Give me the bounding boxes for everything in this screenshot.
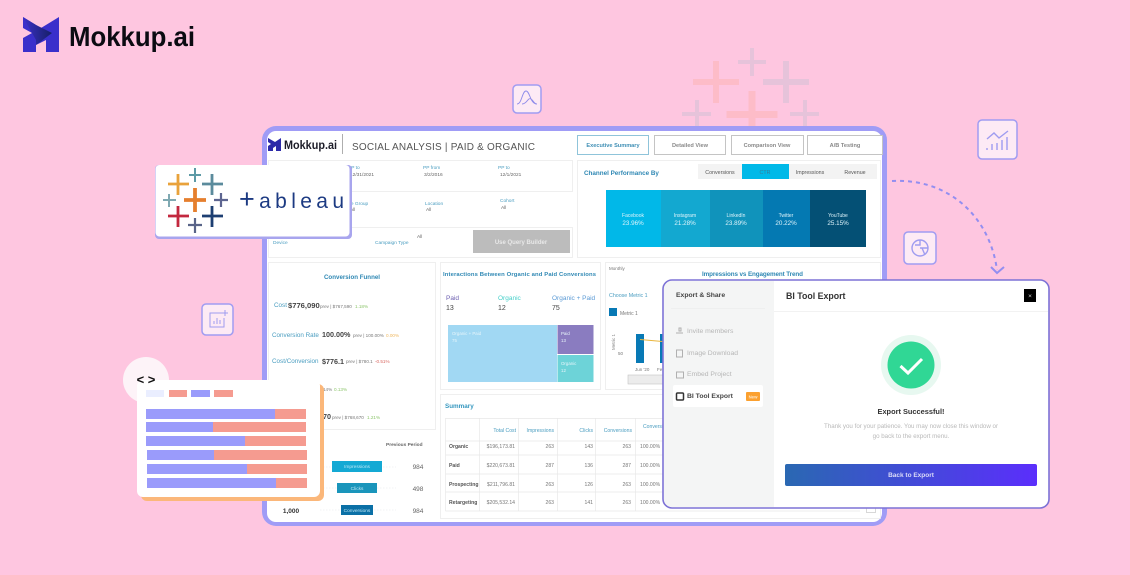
panel: summary table: 263 bbox=[622, 482, 631, 488]
funnel chart: 984 bbox=[413, 508, 424, 515]
channel treemap: YouTube bbox=[828, 213, 848, 219]
filter panel: 3/2/2016 bbox=[424, 172, 443, 178]
icon: add chart bbox=[202, 304, 233, 335]
funnel chart: Conversions bbox=[344, 508, 371, 514]
panel: summary table: Conversions bbox=[604, 428, 632, 434]
panel: impressions vs engagement trend: Jun '20 bbox=[635, 367, 650, 372]
panel: summary table: 136 bbox=[584, 463, 593, 469]
channel treemap: 25.15% bbox=[827, 220, 849, 227]
panel: conversion funnel: prev | $767,590 bbox=[320, 304, 352, 309]
panel: summary table: Total Cost bbox=[493, 428, 517, 434]
panel: summary table: 263 bbox=[546, 444, 554, 450]
close button bbox=[1024, 289, 1036, 302]
modal sidebar: Invite members bbox=[687, 328, 734, 335]
filter panel: Cohort bbox=[500, 198, 515, 204]
panel: impressions vs engagement trend bbox=[606, 262, 880, 390]
channel treemap: 23.96% bbox=[622, 220, 644, 227]
channel treemap bbox=[606, 190, 866, 247]
icon: code symbol: < > bbox=[137, 372, 156, 387]
filter panel: All bbox=[350, 207, 355, 213]
tableau mark bbox=[163, 168, 228, 233]
panel: conversion funnel: 0.00% bbox=[386, 333, 399, 338]
channel treemap: Instagram bbox=[674, 213, 696, 219]
panel: conversion funnel: 1.18% bbox=[355, 304, 368, 309]
funnel chart: Clicks bbox=[351, 486, 364, 492]
panel: organic and paid interactions: Organic + Paid bbox=[552, 295, 596, 302]
panel: summary table: Clicks bbox=[579, 428, 593, 434]
filter panel: PP to bbox=[348, 165, 360, 171]
panel: organic and paid interactions: 75 bbox=[552, 305, 560, 312]
panel: conversion funnel: 1.21% bbox=[367, 415, 380, 420]
panel: impressions vs engagement trend: Feb bbox=[657, 367, 665, 372]
channel treemap: 23.89% bbox=[725, 220, 747, 227]
filter panel: Campaign Type bbox=[375, 240, 409, 246]
panel: impressions vs engagement trend: Metric 1 bbox=[611, 334, 616, 350]
panel: conversion funnel: prev | $780.1 bbox=[346, 359, 373, 364]
channel treemap: Twitter bbox=[779, 213, 794, 219]
filter panel: PP from bbox=[423, 165, 440, 171]
panel: organic and paid interactions: Paid bbox=[446, 295, 459, 302]
card: tableau logo bbox=[155, 165, 352, 239]
panel: summary table: Paid bbox=[449, 463, 460, 469]
panel: summary table: Retargeting bbox=[449, 500, 477, 506]
modal sidebar: Image Download bbox=[687, 350, 738, 357]
panel: conversion funnel: 100.00% bbox=[322, 330, 351, 339]
panel: conversion funnel: Cost/Conversion bbox=[272, 358, 319, 365]
view tabs bbox=[578, 136, 882, 154]
filter panel: All bbox=[417, 234, 422, 240]
organic and paid treemap: 75 bbox=[452, 338, 457, 343]
panel: summary table: Prospecting bbox=[449, 482, 478, 488]
panel: organic and paid interactions: Organic bbox=[498, 295, 522, 302]
active menu item bbox=[673, 385, 763, 407]
panel: summary table: Summary bbox=[445, 403, 474, 410]
tableau wordmark: +ableau bbox=[239, 184, 344, 214]
organic and paid treemap: Organic + Paid bbox=[452, 331, 482, 336]
panel: summary table: 100.00% bbox=[640, 463, 661, 469]
stacked bars bbox=[146, 409, 307, 488]
background tableau plus pattern bbox=[682, 48, 819, 130]
panel: summary table: 100.00% bbox=[640, 500, 661, 506]
filter panel: Location bbox=[425, 201, 443, 207]
active menu item: New bbox=[749, 394, 758, 400]
arrow: dashed curve bbox=[892, 181, 1004, 273]
filter panel: 12/1/2021 bbox=[500, 172, 522, 178]
success message bbox=[824, 407, 998, 440]
metric toggle: CTR bbox=[760, 170, 771, 176]
logo: Mokkup.ai: Mokkup.ai bbox=[69, 21, 195, 52]
panel: impressions vs engagement trend: Choose Metric 1 bbox=[609, 293, 648, 299]
panel: summary table: Impressions bbox=[527, 428, 554, 434]
channel treemap: 20.22% bbox=[775, 220, 797, 227]
view tabs: Executive Summary bbox=[586, 143, 640, 149]
funnel chart: Impressions bbox=[344, 464, 371, 470]
success message: go back to the export menu. bbox=[873, 433, 950, 440]
panel: summary table: Conversion bbox=[643, 424, 669, 430]
metric toggle: Revenue bbox=[844, 170, 866, 176]
back to export button: Back to Export bbox=[888, 472, 935, 479]
modal sidebar bbox=[664, 281, 774, 507]
panel: conversion funnel: Conversion Rate bbox=[272, 332, 319, 339]
filter panel: PP to bbox=[498, 165, 510, 171]
panel: summary table bbox=[440, 394, 880, 518]
funnel chart: 498 bbox=[413, 486, 424, 493]
funnel chart bbox=[283, 442, 424, 515]
dashboard logo: Mokkup.ai bbox=[284, 140, 337, 152]
organic and paid treemap: Organic bbox=[561, 361, 577, 366]
panel: summary table: $196,173.81 bbox=[487, 444, 515, 450]
panel: dashboard bbox=[262, 126, 887, 526]
panel: summary table: 263 bbox=[546, 482, 554, 488]
panel: summary table: 263 bbox=[546, 500, 554, 506]
panel: summary table: 287 bbox=[546, 463, 554, 469]
panel: summary table: 126 bbox=[584, 482, 593, 488]
panel: conversion funnel: 70 bbox=[323, 412, 331, 421]
panel: summary table: Organic bbox=[449, 444, 468, 450]
organic and paid treemap: Paid bbox=[561, 331, 570, 336]
panel: channel performance: Channel Performance By bbox=[584, 170, 659, 177]
panel: summary table: $205,532.14 bbox=[487, 500, 515, 506]
view tabs: Detailed View bbox=[672, 143, 709, 149]
panel: channel performance bbox=[578, 160, 880, 258]
icon: curve chart bbox=[513, 85, 541, 113]
modal sidebar: Export & Share bbox=[676, 292, 725, 299]
organic and paid treemap: 13 bbox=[561, 338, 566, 343]
success check icon bbox=[881, 335, 941, 395]
panel: organic and paid interactions bbox=[440, 262, 600, 390]
organic and paid treemap bbox=[448, 325, 594, 382]
filter panel bbox=[268, 160, 572, 258]
panel: conversion funnel: $776,090 bbox=[288, 301, 320, 310]
metric toggle: Conversions bbox=[705, 170, 735, 176]
funnel chart: 1,000 bbox=[283, 508, 300, 515]
modal sidebar: Embed Project bbox=[687, 371, 732, 378]
panel: summary table: 141 bbox=[584, 500, 593, 506]
metric toggle bbox=[698, 164, 877, 179]
panel: summary table: 263 bbox=[622, 500, 631, 506]
dashboard title: SOCIAL ANALYSIS | PAID & ORGANIC bbox=[352, 142, 535, 153]
panel: conversion funnel: Cost bbox=[274, 302, 287, 309]
panel: impressions vs engagement trend: 50 bbox=[618, 351, 624, 356]
funnel chart: Previous Period bbox=[386, 442, 423, 448]
channel treemap: Facebook bbox=[622, 213, 644, 219]
icon: code circle background bbox=[123, 357, 169, 403]
panel: summary table: 100.00% bbox=[640, 444, 661, 450]
panel: conversion funnel: Conversion Funnel bbox=[324, 274, 380, 281]
back to export button bbox=[785, 464, 1037, 486]
panel: conversion funnel: 14% bbox=[323, 387, 332, 392]
logo: Mokkup.ai bbox=[23, 17, 195, 52]
channel treemap: LinkedIn bbox=[727, 213, 746, 219]
panel: summary table: $211,796.81 bbox=[487, 482, 515, 488]
panel: impressions vs engagement trend: Monthly bbox=[609, 266, 626, 271]
panel: conversion funnel: prev | 100.00% bbox=[353, 333, 384, 338]
organic and paid treemap: 12 bbox=[561, 368, 566, 373]
view tabs: Comparison View bbox=[744, 143, 791, 149]
dashboard logo bbox=[268, 134, 343, 154]
modal: BI tool export bbox=[663, 280, 1049, 508]
filter panel: Device bbox=[273, 240, 288, 246]
filter panel: Age Group bbox=[345, 201, 369, 207]
view tabs: A/B Testing bbox=[830, 143, 861, 149]
panel: conversion funnel: prev | $768,670 bbox=[332, 415, 364, 420]
panel: conversion funnel bbox=[268, 262, 436, 430]
close button: × bbox=[1028, 293, 1032, 300]
filter panel: 12/31/2021 bbox=[350, 172, 374, 178]
panel: organic and paid interactions: 12 bbox=[498, 305, 506, 312]
filter panel: All bbox=[426, 207, 431, 213]
panel: conversion funnel: -0.51% bbox=[375, 359, 390, 364]
legend swatches bbox=[146, 390, 233, 397]
success message: Thank you for your patience. You may now close this window or bbox=[824, 423, 998, 430]
active menu item: BI Tool Export bbox=[687, 393, 734, 400]
panel: summary table: 100.00% bbox=[640, 482, 661, 488]
panel: summary table: 143 bbox=[584, 444, 593, 450]
panel: organic and paid interactions: Interactions Between Organic and Paid Conversions bbox=[443, 272, 597, 278]
funnel chart: 984 bbox=[413, 464, 424, 471]
panel: summary table: $220,673.81 bbox=[487, 463, 515, 469]
query builder button bbox=[473, 230, 570, 253]
panel: impressions vs engagement trend: Impressions vs Engagement Trend bbox=[702, 271, 803, 278]
filter panel: All bbox=[501, 205, 506, 211]
panel: conversion funnel: $776.1 bbox=[322, 357, 344, 366]
card: stacked bar chart bbox=[137, 380, 324, 501]
panel: organic and paid interactions: 13 bbox=[446, 305, 454, 312]
icon: line and bar chart bbox=[978, 120, 1017, 159]
icon: pie chart bbox=[904, 232, 936, 264]
channel treemap: 21.28% bbox=[674, 220, 696, 227]
panel: summary table: 287 bbox=[622, 463, 631, 469]
metric toggle: Impressions bbox=[796, 170, 825, 176]
query builder button: Use Query Builder bbox=[495, 240, 548, 246]
success message: Export Successful! bbox=[878, 407, 944, 416]
panel: summary table: 263 bbox=[622, 444, 631, 450]
panel: conversion funnel: 0.13% bbox=[334, 387, 347, 392]
modal heading: BI Tool Export bbox=[786, 291, 846, 301]
panel: impressions vs engagement trend: Metric 1 bbox=[620, 311, 638, 317]
